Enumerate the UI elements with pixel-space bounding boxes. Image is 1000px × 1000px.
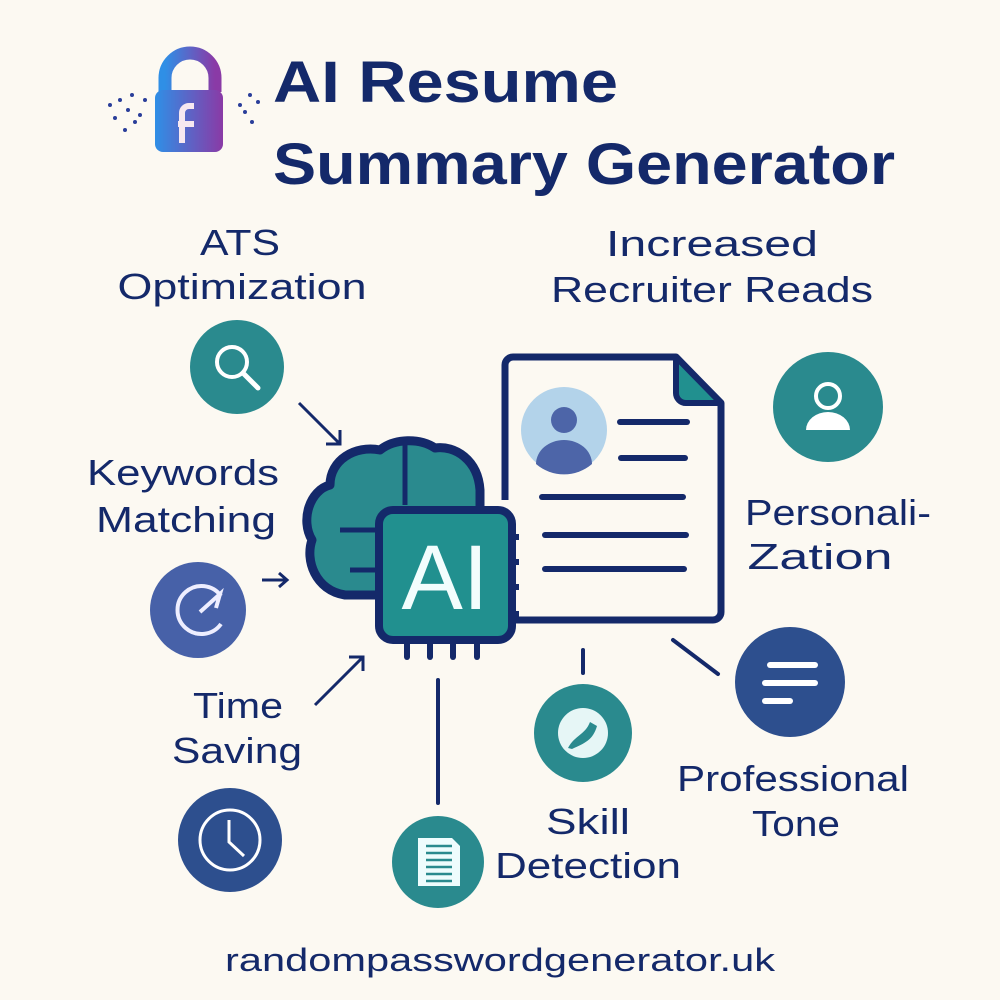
label: Increased Recruiter Reads <box>551 223 873 310</box>
label: Time Saving: Time <box>193 685 283 726</box>
line to skill <box>581 650 585 673</box>
label: Personalization: Personali- <box>745 492 931 533</box>
line to document icon <box>436 680 440 803</box>
icon: clock <box>178 788 282 892</box>
label: Time Saving <box>172 685 302 771</box>
label: Skill Detection: Detection <box>495 845 681 886</box>
label: Professional Tone: Professional <box>677 758 909 799</box>
title: AI Resume <box>273 50 618 115</box>
label: ATS Optimization: Optimization <box>118 266 366 307</box>
icon: person <box>773 352 883 462</box>
footer url: randompasswordgenerator.uk <box>225 942 776 978</box>
arrow: ATS to AI <box>299 403 340 444</box>
label: Personalization <box>745 492 931 577</box>
label: Skill Detection <box>495 801 681 886</box>
icon: document <box>392 816 484 908</box>
label: Professional Tone: Tone <box>752 803 840 844</box>
avatar <box>521 387 607 474</box>
icon: lock <box>108 53 260 152</box>
label: ATS Optimization: ATS <box>200 222 280 263</box>
label: Keywords Matching: Matching <box>96 499 276 540</box>
label: Increased Recruiter Reads: Increased <box>606 223 818 264</box>
AI chip: AI <box>402 527 488 629</box>
label: Skill Detection: Skill <box>546 801 630 842</box>
label: Keywords Matching <box>87 452 279 540</box>
title <box>273 50 895 197</box>
label: Time Saving: Saving <box>172 730 302 771</box>
AI chip <box>379 510 530 657</box>
label: ATS Optimization <box>118 222 366 307</box>
arrow: keywords to AI <box>262 573 287 587</box>
brain <box>307 441 480 595</box>
arrow: time to AI <box>315 657 363 705</box>
resume document <box>505 357 721 622</box>
line to professional <box>673 640 718 674</box>
label: Increased Recruiter Reads: Recruiter Reads <box>551 269 873 310</box>
title: Summary Generator <box>273 132 895 197</box>
label: Keywords Matching: Keywords <box>87 452 279 493</box>
icon: refresh <box>150 562 246 658</box>
label: Professional Tone <box>677 758 909 844</box>
icon: professional tone <box>735 627 845 737</box>
icon: search <box>190 320 284 414</box>
icon: skill <box>534 684 632 782</box>
label: Personalization: Zation <box>748 536 892 577</box>
